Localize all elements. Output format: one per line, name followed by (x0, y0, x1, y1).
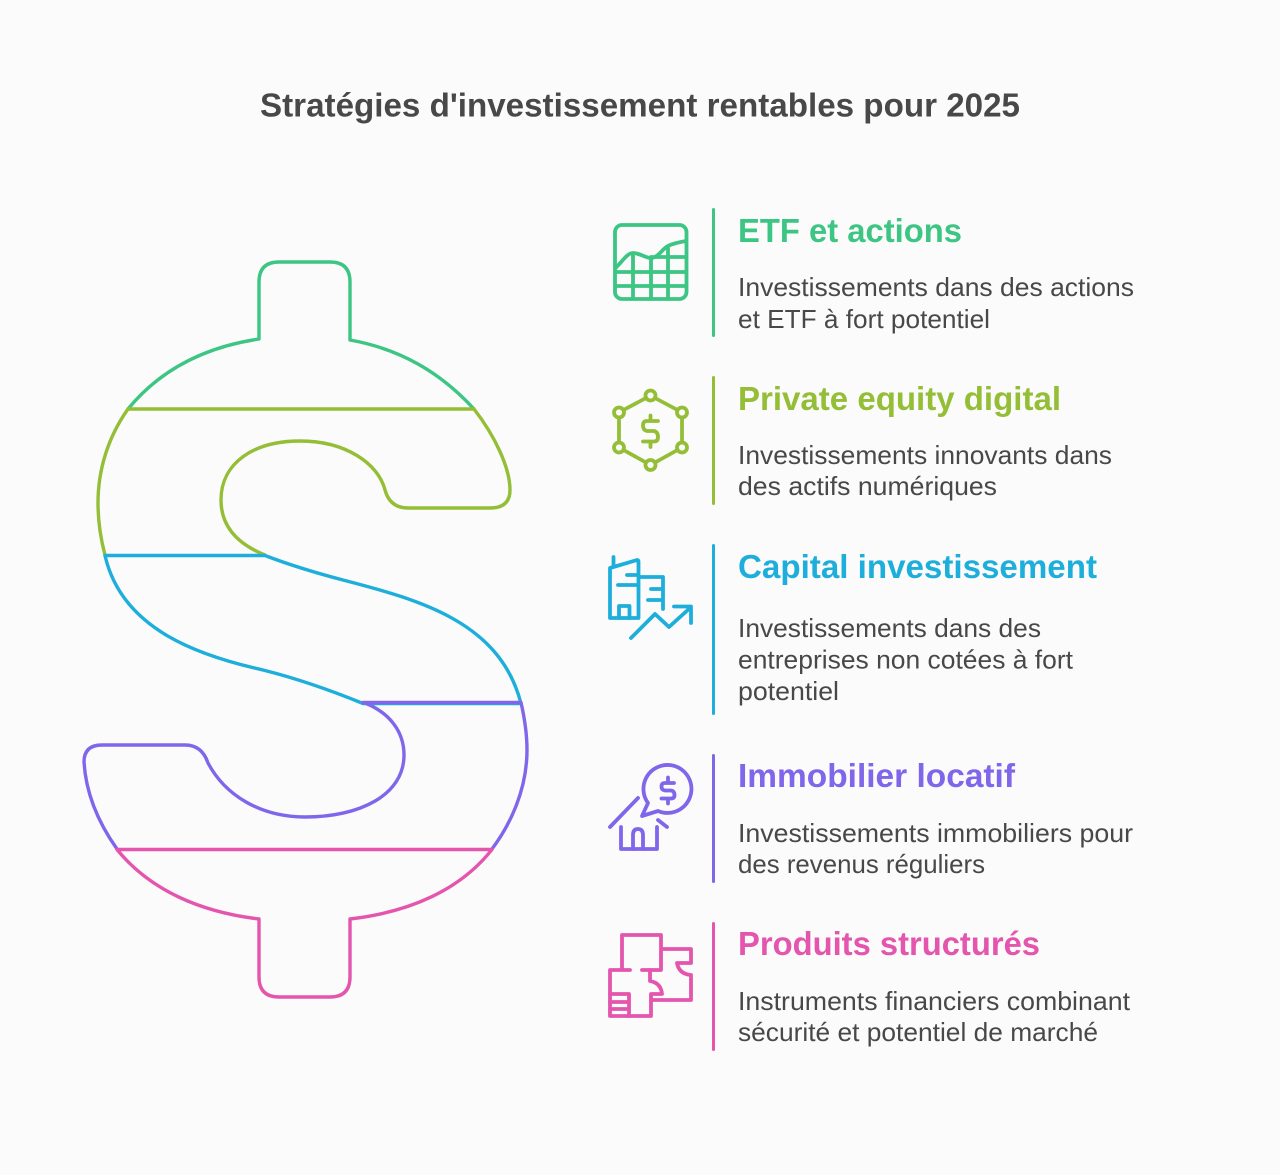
description: entreprises non cotées à fort (738, 644, 1074, 674)
dollar segment: olive (98, 409, 510, 555)
icon: buildings with rising arrow (610, 557, 691, 638)
description: Investissements innovants dans (738, 440, 1112, 470)
icon: house with dollar speech bubble (610, 765, 691, 849)
heading: Produits structurés (738, 925, 1040, 962)
heading: Capital investissement (738, 548, 1097, 585)
title: Stratégies d'investissement rentables pour 2025 (260, 86, 1020, 124)
item: Immobilier locatif (610, 754, 1133, 883)
divider bar (712, 922, 715, 1051)
description (738, 613, 1074, 706)
icon: floor plan (610, 935, 691, 1016)
item: Produits structurés (610, 922, 1131, 1051)
divider bar (712, 544, 715, 715)
heading: Immobilier locatif (738, 757, 1016, 794)
description (738, 272, 1134, 334)
item: Private equity digital (614, 376, 1112, 505)
divider bar (712, 376, 715, 505)
description: Investissements dans des actions (738, 272, 1134, 302)
description: potentiel (738, 676, 839, 706)
dollar segment: purple (84, 702, 527, 849)
icon: chart grid (615, 225, 686, 299)
item: Capital investissement (610, 544, 1097, 715)
description: Investissements dans des (738, 613, 1041, 643)
item: ETF et actions (615, 208, 1134, 337)
heading: Private equity digital (738, 380, 1061, 417)
dollar segment: pink bottom (117, 850, 492, 997)
description: sécurité et potentiel de marché (738, 1017, 1098, 1047)
dollar segment: blue (105, 556, 521, 704)
heading: ETF et actions (738, 212, 962, 249)
divider bar (712, 754, 715, 883)
description (738, 986, 1131, 1047)
description: des revenus réguliers (738, 849, 985, 879)
dollar segment: green top (128, 262, 474, 409)
divider bar (712, 208, 715, 337)
dollar sign illustration (84, 262, 527, 997)
description: Investissements immobiliers pour (738, 818, 1133, 848)
description (738, 440, 1112, 501)
description: et ETF à fort potentiel (738, 304, 990, 334)
description: des actifs numériques (738, 471, 997, 501)
description: Instruments financiers combinant (738, 986, 1131, 1016)
description (738, 818, 1133, 879)
icon: dollar hexagon network (614, 390, 687, 470)
